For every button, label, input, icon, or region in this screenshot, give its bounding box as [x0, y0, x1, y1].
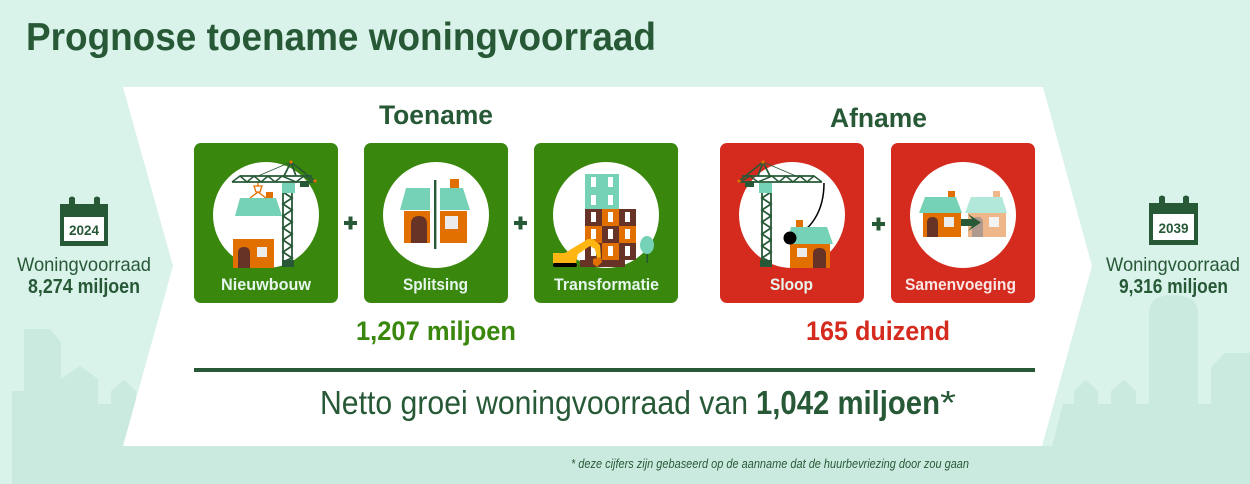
net growth statement: 1,042 miljoen [756, 384, 940, 421]
value end stock: 9,316 miljoen [1119, 276, 1228, 298]
label: Samenvoeging [905, 276, 1016, 294]
panel: Sloop [720, 143, 864, 303]
icon: building transformation with excavator [553, 174, 654, 267]
total increase: 1,207 miljoen [356, 316, 516, 346]
net growth statement: * [940, 384, 956, 421]
icon: split house [400, 179, 470, 249]
label: Nieuwbouw [221, 276, 311, 294]
skyline left [12, 329, 1250, 484]
label start stock: Woningvoorraad [17, 254, 151, 276]
plus sign [514, 216, 527, 230]
footnote: * deze cijfers zijn gebaseerd op de aanname dat de huurbevriezing door zou gaan [571, 456, 969, 471]
net growth statement: Netto groei woningvoorraad van [320, 384, 748, 421]
label: Sloop [770, 276, 813, 294]
title: Prognose toename woningvoorraad [26, 16, 656, 59]
icon: calendar 2039: 2039 [1158, 221, 1189, 236]
label: Splitsing [403, 276, 468, 294]
icon: calendar 2024: 2024 [69, 223, 100, 238]
icon: house under construction with crane [232, 160, 317, 268]
label: Transformatie [554, 276, 659, 294]
heading: Afname: Afname [830, 103, 927, 133]
start stock 2024 [17, 196, 151, 298]
heading: Toename: Toename [379, 100, 493, 130]
white arrow panel [123, 87, 1092, 446]
panel: Transformatie [534, 143, 678, 303]
plus sign [344, 216, 357, 230]
panel: Splitsing [364, 143, 508, 303]
icon: crane with wrecking ball and house [737, 160, 833, 268]
panel: Samenvoeging [891, 143, 1035, 303]
total decrease: 165 duizend [806, 316, 950, 346]
icon: merged houses with arrow [919, 191, 1007, 237]
plus sign [872, 218, 885, 230]
end stock 2039 [1106, 196, 1240, 298]
value start stock: 8,274 miljoen [28, 276, 140, 298]
skyline right [1045, 295, 1250, 484]
label end stock: Woningvoorraad [1106, 254, 1240, 276]
panel: Nieuwbouw [194, 143, 338, 303]
